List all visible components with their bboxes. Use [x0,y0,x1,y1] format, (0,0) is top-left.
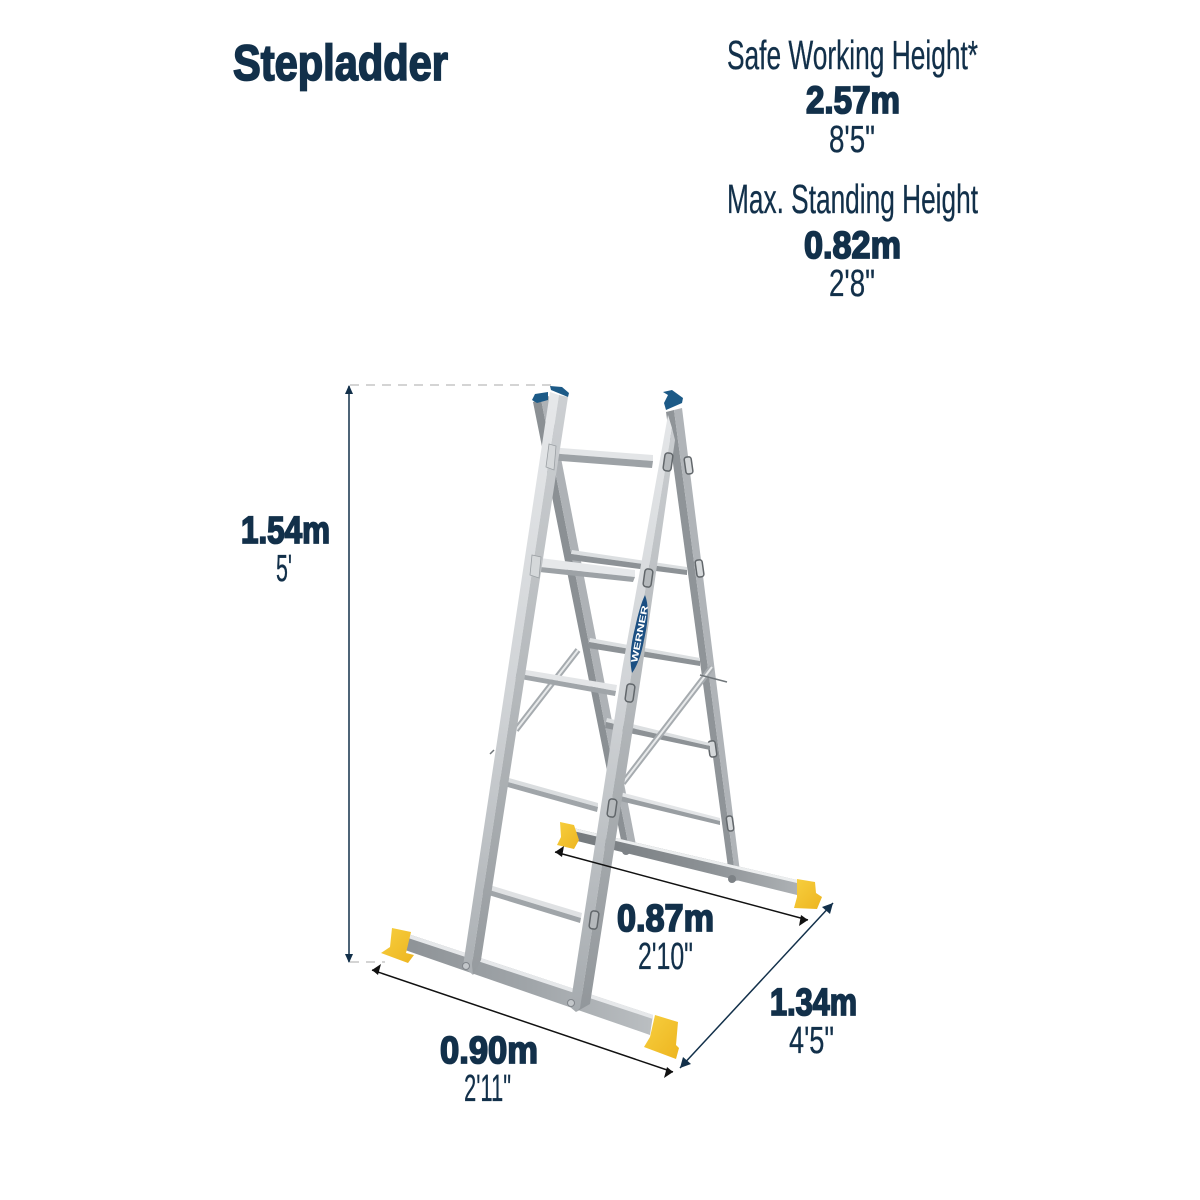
safe working height block [727,32,978,161]
front width label [440,1030,538,1110]
depth label: 1.34m [770,982,857,1024]
front width label: 0.90m [440,1030,538,1072]
title: Stepladder [233,35,448,91]
max standing height block: 0.82m [804,225,901,267]
rear width label [617,898,714,978]
front right stile [570,415,675,1012]
front stile slots [589,453,673,929]
rung brackets [530,444,556,578]
depth dimension arrow [680,903,833,1068]
rear width dimension arrow [555,846,808,926]
front bolts [462,962,574,1006]
ladder illustration [381,386,822,1059]
blue Werner label [629,595,650,673]
front width dimension arrow [372,964,673,1078]
blue Werner label: WERNER [629,604,650,663]
front left foot [381,928,414,963]
max standing height block [727,176,978,305]
front rungs [482,447,653,923]
max standing height block: Max. Standing Height [727,176,978,222]
front left stile [463,392,568,975]
front width label: 2'11" [464,1068,511,1110]
rear right foot [794,879,822,909]
height label [241,510,330,590]
front base bar [405,933,653,1035]
max standing height block: 2'8" [829,263,875,305]
rear bolts [622,847,736,883]
top caps [532,386,683,410]
depth label [770,982,857,1062]
rear width label: 0.87m [617,898,714,940]
height label: 1.54m [241,510,330,552]
rear base bar [573,828,797,895]
safe working height block: 2.57m [806,80,900,122]
safe working height block: 8'5" [829,119,875,161]
rear left foot [557,822,579,849]
height dimension line [345,385,552,963]
rear left stile [533,396,636,850]
height label: 5' [276,548,292,590]
braces [490,650,727,783]
rear width label: 2'10" [638,936,693,978]
safe working height block: Safe Working Height* [727,32,978,78]
rear right stile [666,408,741,882]
rear rungs [570,550,720,825]
depth label: 4'5" [789,1020,834,1062]
front right foot [644,1015,679,1059]
